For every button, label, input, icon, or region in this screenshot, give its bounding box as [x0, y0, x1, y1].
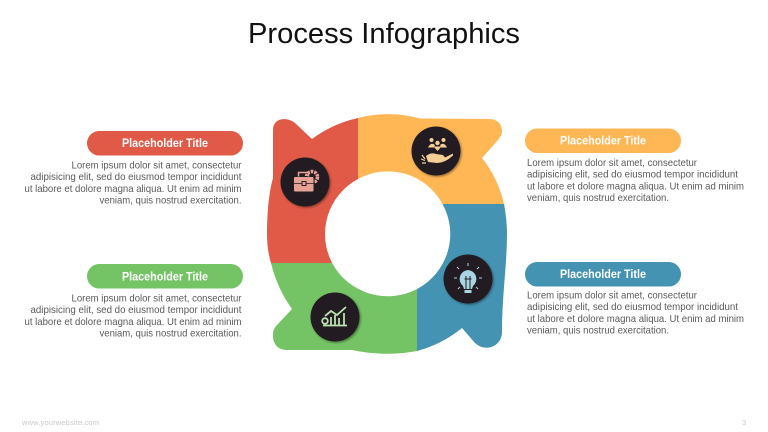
panel: blue: Placeholder Title	[560, 269, 646, 281]
text block: green: ut labore et dolore magna aliqua. Ut enim ad minim	[24, 317, 242, 328]
pill: red title	[87, 131, 243, 156]
text block: blue: ut labore et dolore magna aliqua. Ut enim ad minim	[527, 314, 744, 325]
footer website: www.yourwebsite.com	[21, 418, 99, 427]
text block: green: adipisicing elit, sed do eiusmod tempor incididunt	[30, 305, 242, 316]
text block: red: Lorem ipsum dolor sit amet, consectetur	[72, 160, 242, 172]
panel: yellow: Placeholder Title	[560, 136, 646, 148]
segment: blue	[417, 204, 507, 351]
text block: yellow: ut labore et dolore magna aliqua. Ut enim ad minim	[527, 182, 744, 192]
pill: blue title	[525, 262, 681, 286]
icon: light bulb	[444, 254, 492, 304]
segment: green	[271, 263, 417, 354]
pill: yellow title	[525, 128, 681, 153]
icon: briefcase and gear	[280, 158, 330, 206]
text block: yellow	[527, 158, 744, 204]
text block: yellow: Lorem ipsum dolor sit amet, consectetur	[527, 158, 697, 169]
panel: red: Placeholder Title	[122, 138, 208, 150]
panel: green	[24, 264, 243, 340]
page number: 3	[742, 418, 746, 427]
title: Process Infographics	[248, 18, 520, 50]
panel: yellow	[525, 128, 744, 204]
text block: red: veniam, quis nostrud exercitation.	[100, 196, 242, 206]
text block: red: adipisicing elit, sed do eiusmod tempor incididunt	[30, 172, 242, 183]
text block: blue: adipisicing elit, sed do eiusmod tempor incididunt	[527, 302, 738, 313]
text block: red	[24, 160, 242, 206]
segment: red	[267, 118, 358, 263]
icon: growth chart	[310, 292, 360, 342]
text block: blue: veniam, quis nostrud exercitation.	[527, 326, 669, 336]
text block: yellow: veniam, quis nostrud exercitation.	[527, 193, 669, 204]
text block: blue: Lorem ipsum dolor sit amet, consectetur	[527, 290, 697, 302]
icon: hand holding people	[412, 126, 460, 176]
text block: green: Lorem ipsum dolor sit amet, consectetur	[72, 294, 242, 304]
text block: red: ut labore et dolore magna aliqua. Ut enim ad minim	[24, 184, 242, 195]
center hole	[325, 172, 449, 296]
panel: red	[24, 131, 243, 206]
segment: yellow	[358, 114, 504, 204]
text block: yellow: adipisicing elit, sed do eiusmod tempor incididunt	[527, 170, 738, 180]
text block: blue	[527, 290, 744, 336]
text block: green: veniam, quis nostrud exercitation.	[100, 328, 242, 340]
panel: blue	[525, 262, 744, 336]
panel: green: Placeholder Title	[122, 272, 208, 284]
pill: green title	[87, 264, 243, 288]
text block: green	[24, 294, 242, 340]
cycle diagram	[267, 114, 507, 354]
